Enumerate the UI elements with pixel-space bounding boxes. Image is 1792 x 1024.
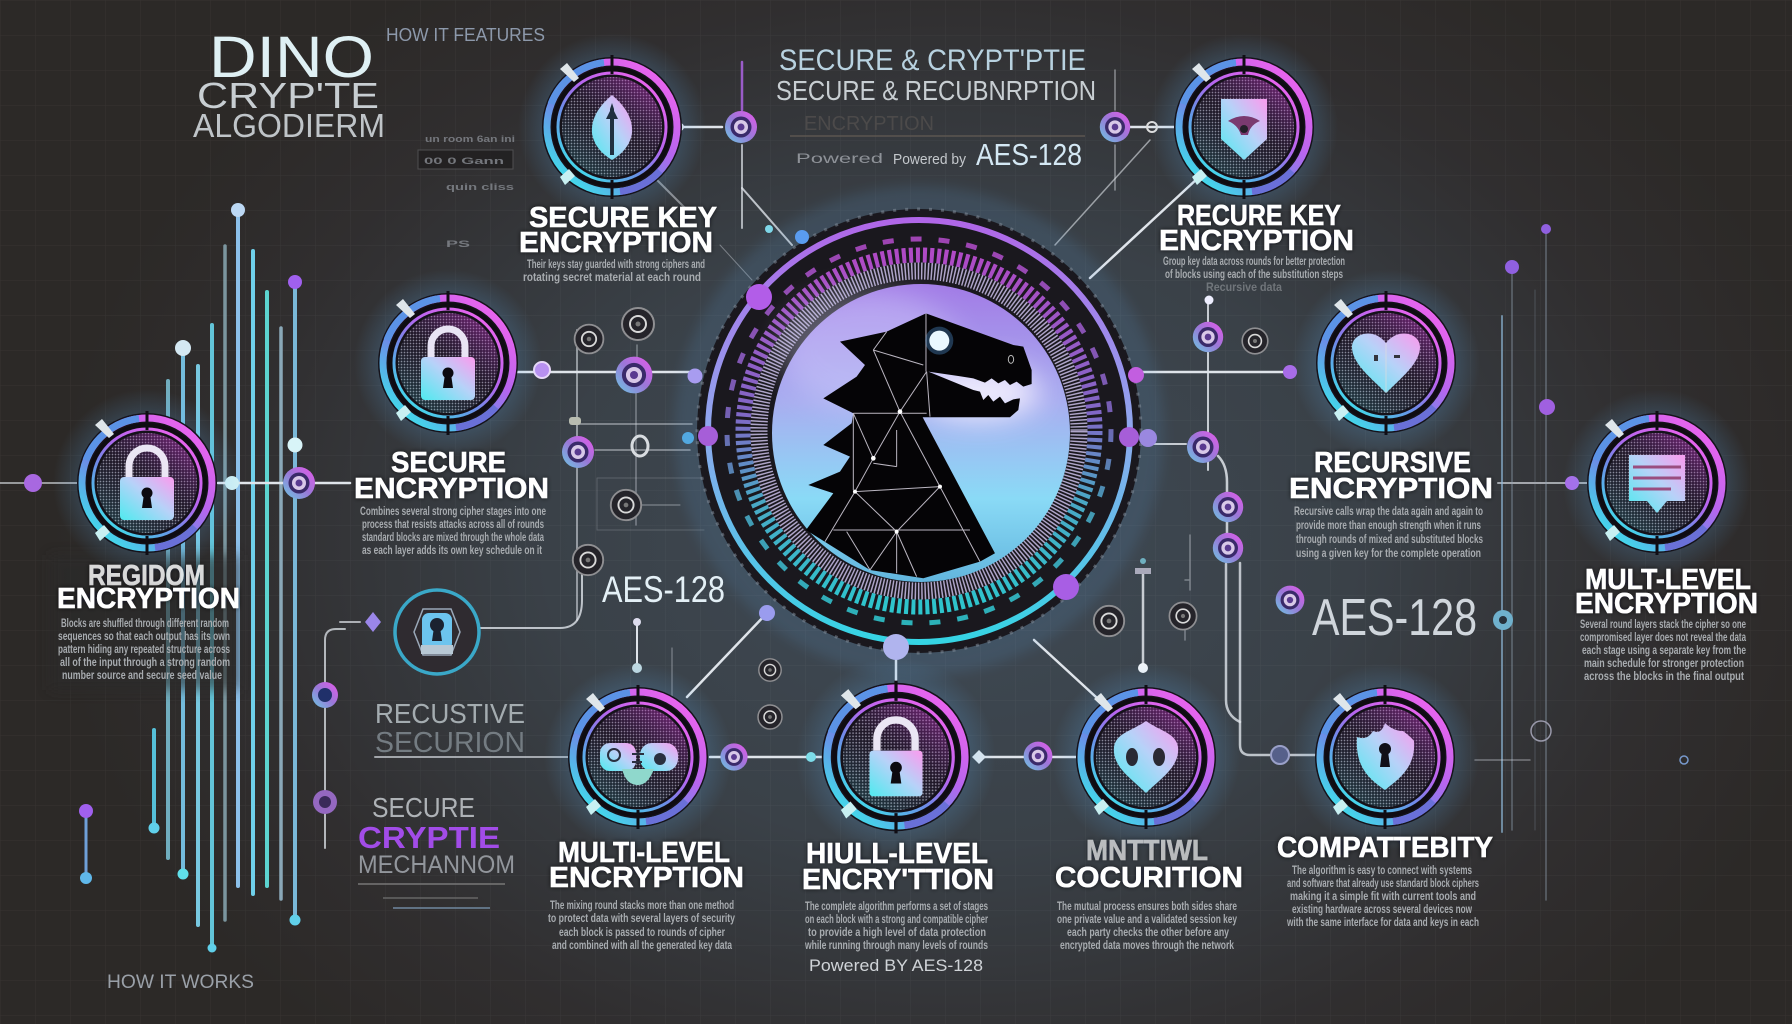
title: CRYP'TE: [197, 75, 379, 116]
backing shade: [50, 555, 240, 690]
faint annotation block: PS: [446, 239, 470, 249]
faint annotation block: quin cliss: [446, 182, 514, 192]
heading block: secure and crypto: Powered: [796, 150, 883, 166]
vertical signal lines left: [79, 203, 302, 952]
panel: multi-level encryption bottom: to protect data with several layers of security: [548, 913, 735, 925]
hollow keyhole node: [395, 590, 479, 674]
panel: mutual security: one private value and a validated session key: [1057, 914, 1237, 926]
icon: document: [1563, 389, 1751, 577]
panel: recursive encryption: provide more than enough strength when it runs: [1296, 520, 1481, 532]
label: secure crypto mechanism: CRYPTIE: [358, 820, 500, 855]
panel: secure key encryption left: [518, 33, 717, 284]
panel: compatibility: The algorithm is easy to connect with systems: [1292, 865, 1472, 877]
panel: multi-level encryption right: [1563, 389, 1758, 683]
panel: recursive encryption: Recursive calls wrap the data again and again to: [1294, 506, 1483, 518]
panel: mutual security: encrypted data moves through the network: [1060, 940, 1234, 952]
small connector nodes: [24, 111, 1688, 814]
label: aes-128 right: AES-128: [1312, 589, 1477, 647]
panel: secure key encryption right: ENCRYPTION: [1159, 225, 1354, 257]
icon: shield: [1150, 33, 1338, 221]
label: recursive security: RECUSTIVE: [375, 698, 525, 729]
panel: secure key encryption right: [1150, 33, 1354, 294]
panel: recursive encryption: ENCRYPTION: [1289, 473, 1493, 505]
panel: secure key encryption left: Their keys stay guarded with strong ciphers and: [527, 259, 705, 271]
title: ALGODIERM: [193, 107, 385, 144]
icon: lock: [354, 269, 542, 457]
faint annotation block: 00 0 Gann: [424, 156, 504, 166]
panel: compatibility: and software that already use standard block ciphers: [1287, 878, 1479, 890]
dino silhouette: [806, 313, 1032, 578]
panel: random encryption: all of the input through a strong random: [60, 657, 230, 669]
panel: full-level encryption: while running through many levels of rounds: [804, 940, 988, 952]
connector lines: [0, 62, 1590, 900]
label: recursive security: [375, 698, 525, 759]
panel: random encryption: [50, 389, 241, 690]
heading block: secure and crypto: SECURE & RECUBNRPTION: [776, 75, 1096, 106]
label: recursive security: SECURION: [375, 727, 525, 759]
panel: multi-level encryption bottom: each block is passed to rounds of cipher: [559, 927, 725, 939]
panel: random encryption: sequences so that each output has its own: [58, 631, 230, 643]
panel: recursive encryption: through rounds of mixed and substituted blocks: [1296, 534, 1483, 546]
label: aes-128 middle left: AES-128: [602, 569, 725, 610]
icon: lock: [53, 389, 241, 577]
panel: secure encryption: ENCRYPTION: [354, 473, 549, 505]
panel: mutual security: COCURITION: [1055, 862, 1243, 894]
faint annotation block: [418, 134, 515, 249]
section label: how it features: HOW IT FEATURES: [386, 25, 545, 45]
heading block: secure and crypto: AES-128: [976, 137, 1082, 172]
label: how it works: HOW IT WORKS: [107, 972, 254, 993]
panel: compatibility: with the same interface for data and keys in each: [1286, 917, 1479, 929]
icon: linked capsule: [544, 663, 732, 851]
label: COMPATTEBITY: [1277, 832, 1493, 864]
label: MULTI-LEVEL: [558, 837, 730, 869]
icon: key shield: [518, 33, 706, 221]
heading block: secure and crypto: SECURE & CRYPT'PTIE: [779, 44, 1086, 77]
panel: random encryption: number source and secure seed value: [62, 670, 222, 682]
panel: multi-level encryption bottom: and combined with all the generated key data: [552, 940, 732, 952]
panel: secure key encryption left: rotating secret material at each round: [523, 272, 701, 284]
label: MULT-LEVEL: [1585, 564, 1751, 596]
panel: recursive encryption: using a given key for the complete operation: [1296, 548, 1481, 560]
panel: full-level encryption: [796, 657, 996, 975]
panel: compatibility: [1277, 663, 1493, 929]
panel: compatibility: making it a simple fit with current tools and: [1290, 891, 1476, 903]
label: secure crypto mechanism: MECHANNOM: [358, 851, 515, 879]
panel: multi-level encryption right: across the blocks in the final output: [1584, 671, 1744, 683]
faint annotation block: un room 6an ini: [425, 134, 515, 144]
panel: secure encryption: [354, 269, 549, 557]
label: SECURE KEY: [529, 202, 717, 234]
title: DINO: [209, 25, 374, 90]
panel: full-level encryption: to provide a high level of data protection: [808, 927, 986, 939]
panel: multi-level encryption bottom: [544, 663, 744, 952]
panel: secure key encryption right: of blocks using each of the substitution steps: [1165, 269, 1343, 281]
title: [193, 25, 385, 144]
panel: recursive encryption: [1289, 269, 1493, 560]
heading block: secure and crypto: Powered by: [893, 151, 966, 168]
panel: full-level encryption: ENCRY'TTION: [802, 864, 994, 896]
panel: random encryption: ENCRYPTION: [57, 583, 240, 615]
panel: secure key encryption right: Group key data across rounds for better protection: [1163, 256, 1345, 268]
icon: lock: [796, 657, 996, 857]
panel: multi-level encryption right: ENCRYPTION: [1575, 588, 1758, 620]
panel: multi-level encryption bottom: ENCRYPTION: [549, 862, 744, 894]
label: REGIDOM: [88, 560, 205, 592]
panel: secure key encryption left: ENCRYPTION: [519, 227, 713, 259]
panel: multi-level encryption right: main schedule for stronger protection: [1584, 658, 1744, 670]
panel: full-level encryption: The complete algorithm performs a set of stages: [805, 901, 988, 913]
panel: random encryption: pattern hiding any repeated structure across: [58, 644, 230, 656]
panel: mutual security: The mutual process ensures both sides share: [1057, 901, 1237, 913]
diamond marker: [365, 612, 381, 632]
icon: heart mask: [1052, 663, 1240, 851]
icon: heart: [1292, 269, 1480, 457]
label: secure crypto mechanism: [358, 792, 515, 908]
icon: shield keyhole: [1291, 663, 1479, 851]
heading block: secure and crypto: ENCRYPTION: [804, 113, 934, 135]
central emblem: dino: [674, 186, 1164, 676]
label: RECURE KEY: [1177, 200, 1341, 232]
panel: secure encryption: Combines several strong cipher stages into one: [360, 506, 546, 518]
panel: compatibility: existing hardware across several devices now: [1292, 904, 1472, 916]
panel: secure encryption: as each layer adds its own key schedule on it: [362, 545, 542, 557]
label: MNTTIWL: [1086, 835, 1208, 867]
label: RECURSIVE: [1314, 447, 1471, 479]
panel: secure encryption: standard blocks are mixed through the whole data: [362, 532, 544, 544]
panel: multi-level encryption bottom: The mixing round stacks more than one method: [550, 900, 734, 912]
heading block: secure and crypto: [776, 44, 1096, 172]
panel: secure key encryption right: Recursive data: [1206, 282, 1283, 294]
label: SECURE: [391, 447, 506, 479]
panel: full-level encryption: Powered BY AES-128: [809, 956, 983, 975]
panel: random encryption: Blocks are shuffled through different random: [61, 618, 229, 630]
panel: mutual security: each party checks the other before any: [1067, 927, 1229, 939]
panel: secure encryption: process that resists attacks across all of rounds: [362, 519, 544, 531]
panel: mutual security: [1052, 663, 1243, 952]
label: secure crypto mechanism: SECURE: [372, 792, 475, 823]
label: HIULL-LEVEL: [806, 838, 988, 870]
panel: full-level encryption: on each block with a strong and compatible cipher: [805, 914, 988, 926]
